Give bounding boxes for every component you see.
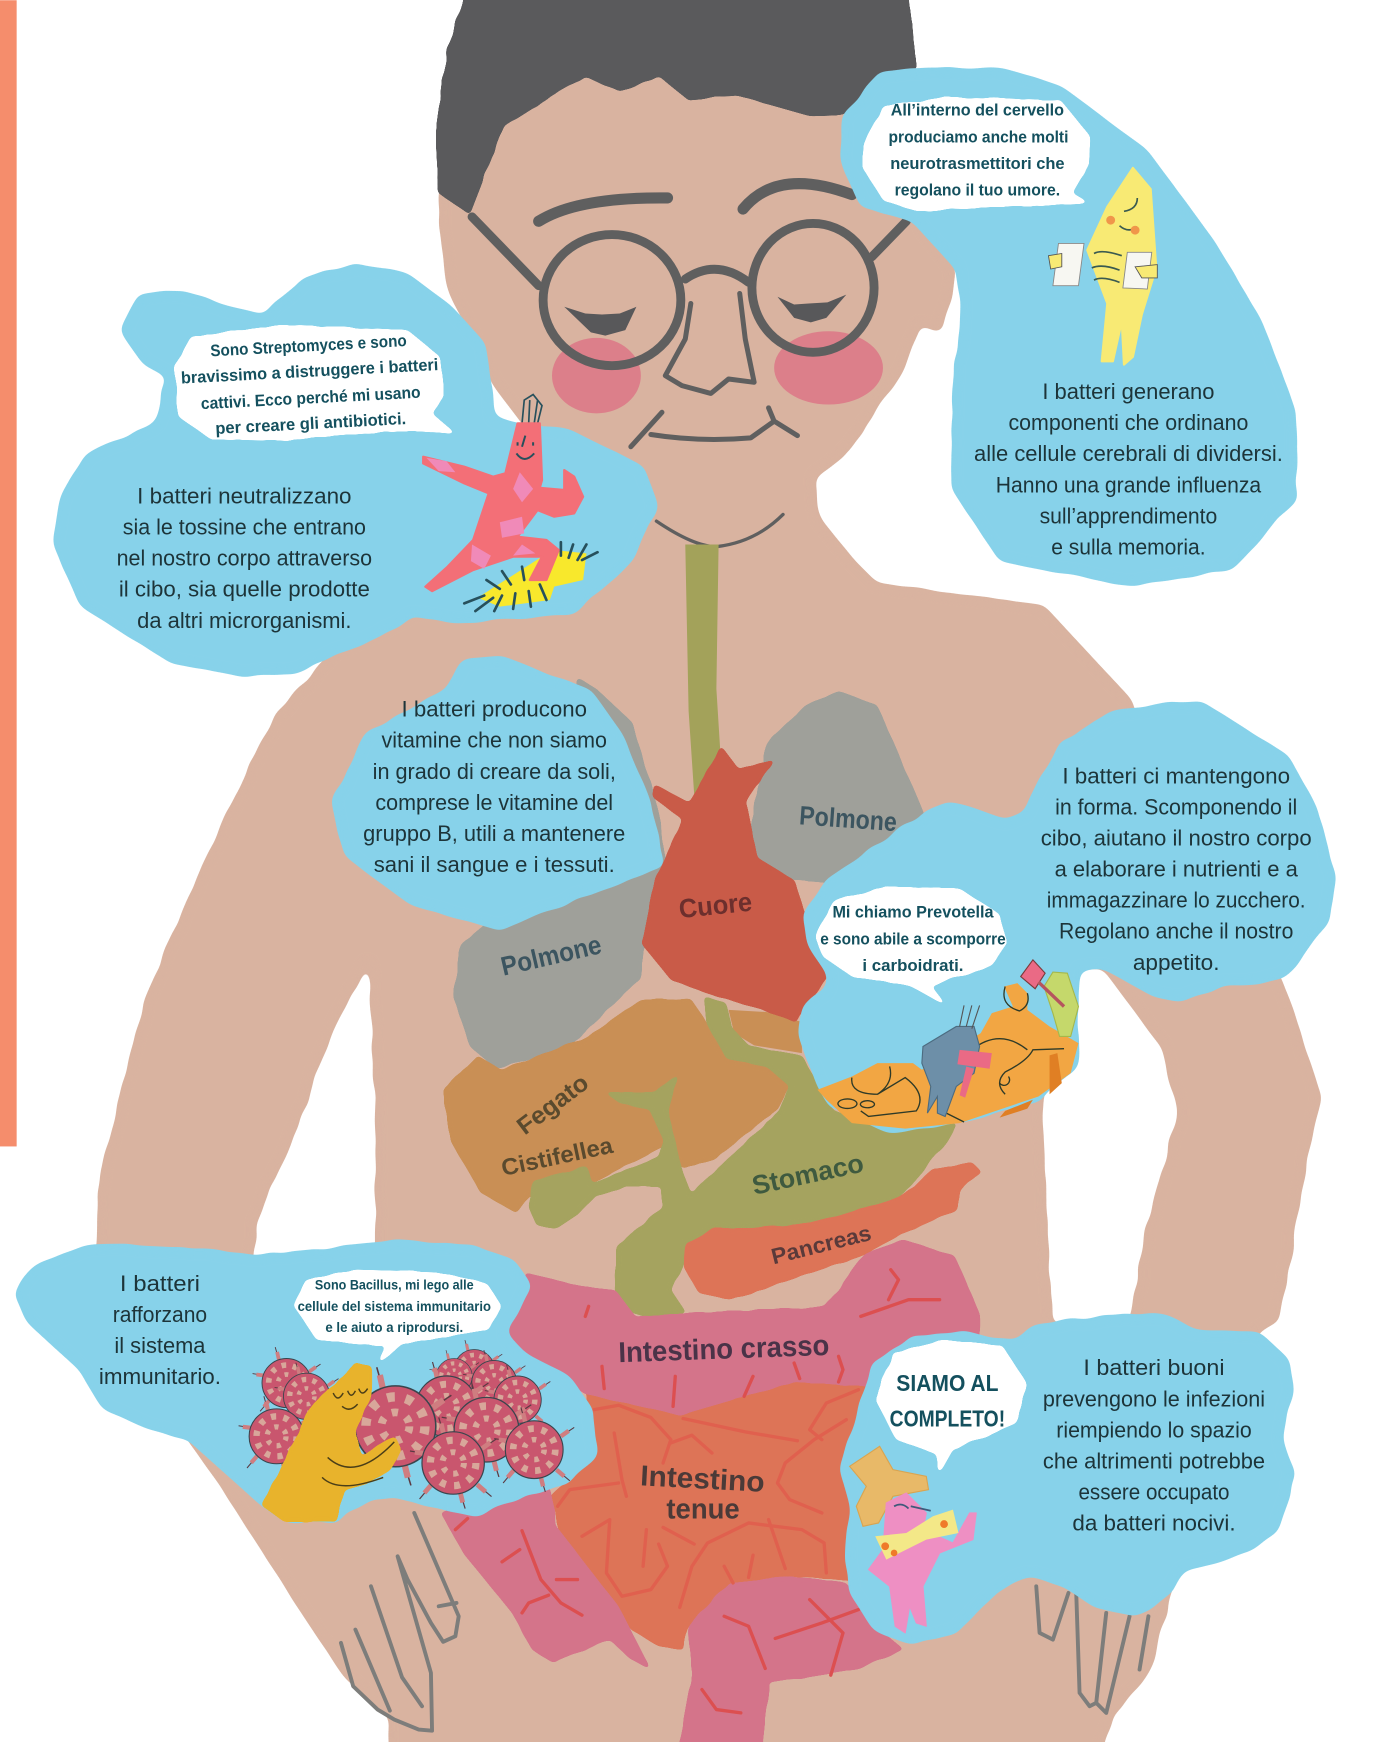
body text: e sulla memoria. [1051, 534, 1206, 559]
panel: toxins bacteria [52, 263, 659, 677]
character: yellow bacterium with papers [1048, 168, 1157, 365]
label: Stomaco: Stomaco [749, 1148, 866, 1201]
speech text [180, 331, 439, 438]
body text [99, 1271, 221, 1389]
speech bubble [294, 1270, 502, 1363]
eyes [564, 295, 846, 336]
speech text: SIAMO AL [896, 1370, 998, 1396]
body text: sull’apprendimento [1040, 503, 1217, 528]
speech text: All’interno del cervello [891, 101, 1064, 120]
body text: da batteri nocivi. [1072, 1511, 1236, 1536]
body text: immagazzinare lo zucchero. [1047, 888, 1306, 913]
speech text: Sono Streptomyces e sono [210, 331, 407, 360]
speech text [890, 1370, 1005, 1431]
body text: I batteri ci mantengono [1062, 763, 1290, 788]
lung right [746, 691, 927, 889]
label: Polmone left: Polmone [498, 929, 604, 982]
organ labels [498, 800, 898, 1526]
speech text: cattivi. Ecco perché mi usano [200, 383, 421, 413]
blue bubble [840, 1313, 1295, 1645]
eyebrows [539, 184, 852, 221]
speech text: Mi chiamo Prevotella [832, 903, 994, 922]
panel: immune system [13, 1240, 598, 1522]
label: Intestino crasso: Intestino crasso [618, 1330, 830, 1369]
illustration: food pile [817, 983, 1078, 1129]
pancreas [683, 1162, 982, 1300]
body text: Hanno una grande influenza [996, 472, 1262, 497]
body text: in grado di creare da soli, [373, 759, 616, 784]
body text: componenti che ordinano [1008, 410, 1248, 435]
body text: nel nostro corpo attraverso [117, 546, 372, 571]
nose and mouth [631, 293, 797, 447]
panel: vitamins [331, 656, 664, 931]
body text: il sistema [114, 1333, 206, 1358]
body text: I batteri producono [402, 697, 587, 722]
body text: in forma. Scomponendo il [1055, 794, 1297, 819]
label: Polmone right: Polmone [798, 800, 898, 837]
body text [1041, 763, 1312, 975]
speech text: e le aiuto a riprodursi. [325, 1319, 463, 1335]
character: blue Prevotella [922, 1005, 992, 1116]
character: green bacterium with hammer [1021, 960, 1078, 1036]
body text: comprese le vitamine del [375, 790, 613, 815]
label: Cuore: Cuore [677, 887, 753, 924]
large intestine lower left [441, 1489, 651, 1670]
large intestine top [506, 1240, 980, 1415]
cheeks [552, 331, 883, 413]
speech text: bravissimo a distruggere i batteri [180, 355, 439, 387]
heart [642, 747, 829, 1022]
body text: il cibo, sia quelle prodotte [119, 577, 370, 602]
label: Cistifellea: Cistifellea [499, 1132, 616, 1181]
face [472, 184, 906, 547]
body text: appetito. [1133, 950, 1220, 975]
body text: I batteri [120, 1271, 200, 1296]
right hand fingers [1036, 1586, 1148, 1713]
body text [1043, 1355, 1265, 1536]
speech bubble [815, 887, 1007, 1007]
body text: Regolano anche il nostro [1059, 919, 1293, 944]
left hand fingers [341, 1513, 459, 1731]
body text: a elaborare i nutrienti e a [1055, 857, 1298, 882]
panel: digestion [797, 700, 1336, 1133]
speech bubble [875, 1340, 1026, 1475]
body text: gruppo B, utili a mantenere [363, 821, 625, 846]
orange side stripe [0, 0, 17, 1146]
hair [435, 0, 917, 215]
label: Fegato: Fegato [512, 1069, 594, 1140]
oesophagus [685, 544, 722, 794]
body text: prevengono le infezioni [1043, 1386, 1265, 1411]
speech text: regolano il tuo umore. [895, 181, 1060, 200]
body text: vitamine che non siamo [382, 728, 607, 753]
body text: sani il sangue e i tessuti. [374, 852, 615, 877]
panel: infections [840, 1313, 1295, 1645]
illustration: immune cells [239, 1340, 574, 1509]
speech text [298, 1277, 491, 1335]
organs [441, 544, 982, 1742]
speech bubble [174, 325, 456, 440]
body text: essere occupato [1078, 1480, 1230, 1505]
body text: cibo, aiutano il nostro corpo [1041, 825, 1312, 850]
body text: riempiendo lo spazio [1056, 1417, 1252, 1442]
speech text: neurotrasmettitori che [890, 154, 1065, 173]
blue bubble [331, 656, 664, 931]
label: Pancreas: Pancreas [769, 1220, 874, 1269]
body text: sia le tossine che entrano [123, 514, 366, 539]
colon veins [455, 1270, 940, 1713]
speech text: per creare gli antibiotici. [215, 409, 407, 438]
liver small piece [729, 1010, 802, 1053]
body text: rafforzano [113, 1302, 207, 1327]
speech text: COMPLETO! [890, 1405, 1005, 1431]
blue bubble [13, 1240, 598, 1522]
body text: I batteri neutralizzano [137, 483, 352, 508]
body text [974, 379, 1283, 559]
body text: I batteri generano [1042, 379, 1215, 404]
panel: brain bacteria [840, 68, 1296, 587]
liver [443, 999, 790, 1213]
body text [363, 697, 625, 877]
speech text [889, 101, 1068, 200]
intestine veins [558, 1390, 859, 1607]
hands [341, 1513, 1148, 1731]
small intestine [551, 1377, 877, 1650]
speech text: cellule del sistema immunitario [298, 1298, 491, 1314]
body text: da altri microrganismi. [137, 608, 352, 633]
body text: alle cellule cerebrali di dividersi. [974, 441, 1283, 466]
label: Intestino tenue: Intestino [639, 1460, 765, 1499]
character: pink bacterium with hat and bow tie [850, 1446, 976, 1633]
speech text: i carboidrati. [862, 956, 963, 975]
blue bubble [52, 263, 659, 677]
speech text: produciamo anche molti [889, 127, 1068, 146]
character: red Streptomyces [423, 395, 583, 591]
speech text: e sono abile a scomporre [820, 929, 1006, 948]
speech text [820, 903, 1006, 975]
speech text: Sono Bacillus, mi lego alle [315, 1277, 474, 1293]
body text: I batteri buoni [1083, 1355, 1225, 1380]
body text: che altrimenti potrebbe [1043, 1449, 1265, 1474]
label: tenue: tenue [666, 1494, 740, 1526]
blue bubble [840, 68, 1296, 587]
glasses [472, 217, 906, 366]
character: yellow Bacillus [261, 1363, 401, 1522]
body text [117, 483, 372, 633]
large intestine lower right [673, 1576, 904, 1742]
blue bubble [797, 700, 1336, 1133]
body text: immunitario. [99, 1364, 221, 1389]
speech bubble [863, 97, 1090, 211]
stomach and gall bladder [529, 997, 957, 1319]
lung left [453, 678, 666, 1069]
chin line [656, 514, 783, 547]
character: yellow spiky bacterium [464, 542, 598, 611]
